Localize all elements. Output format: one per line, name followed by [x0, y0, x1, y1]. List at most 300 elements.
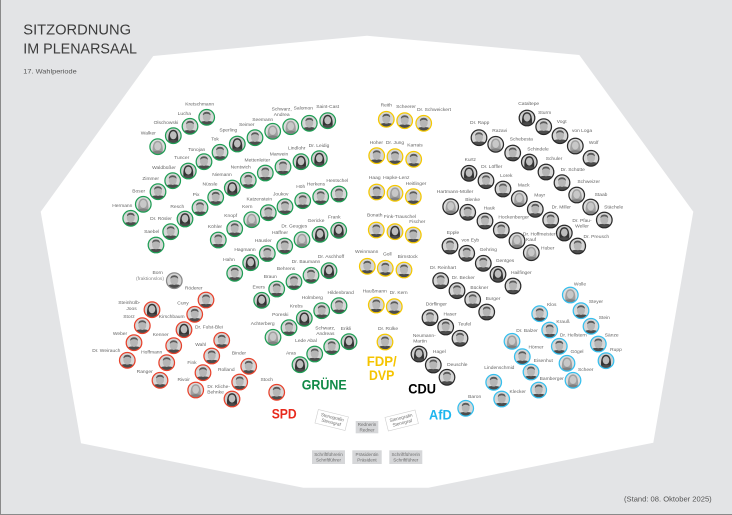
heading: GRÜNE: GRÜNE: [302, 376, 347, 392]
seat: Dr. Baumann: Dr. Baumann: [292, 259, 321, 265]
seat: Dr. Hellstern: [552, 332, 587, 354]
seat: Lede Abal: Lede Abal: [295, 338, 317, 344]
seat: Lindlohr: [288, 146, 309, 170]
seat: Bonath: [367, 212, 384, 238]
seat: Dr. Löffler: [478, 164, 503, 188]
seat: Schwarz, Andrea: Schwarz,: [272, 106, 292, 112]
seat: Köhler: Köhler: [208, 224, 222, 230]
seat: Razavi: [488, 128, 507, 152]
seat: Achterberg: [251, 321, 281, 345]
seat: Klos: Klos: [547, 302, 557, 308]
seat: Bonath: Bonath: [367, 212, 383, 218]
seat: Vogt: [552, 119, 568, 144]
clerk desk left: Schriftführerin: [314, 452, 343, 457]
seat: Gehring: [476, 247, 497, 271]
seat: Wolf: [583, 140, 599, 166]
seat: Dr. Kliche-Behnke: Dr. Kliche-: [207, 384, 230, 390]
seat: Kern: Kern: [242, 204, 253, 210]
seat: Zimmer: [142, 176, 166, 200]
seat: Teufel: Teufel: [458, 322, 471, 328]
seat: Dr. Rülke: [377, 326, 398, 350]
clerk desk left: [312, 450, 345, 464]
seat: Krauß: [542, 319, 570, 338]
seat: Mayr: [528, 192, 546, 217]
clerk desk left: Schriftführer: [316, 458, 341, 462]
seat: Dr. Balzer: Dr. Balzer: [516, 328, 538, 334]
seat: Eisenhut: Eisenhut: [534, 358, 553, 364]
seat: Dr. Schweickert: Dr. Schweickert: [417, 107, 452, 113]
seat: Storz: Storz: [123, 314, 135, 320]
seat: Lindenschmid: Lindenschmid: [484, 365, 515, 371]
seat: Lindenschmid: [484, 365, 515, 390]
seat: Häffner: [272, 230, 293, 254]
seat: Fink: Fink: [187, 360, 197, 366]
seat: Dr. Kern: Dr. Kern: [390, 290, 408, 296]
seat: Hartmann-Müller: Hartmann-Müller: [437, 189, 474, 195]
seat: Scheer: Scheer: [578, 367, 594, 373]
seat: Stoch: Stoch: [260, 377, 273, 383]
seat: Häffner: Häffner: [272, 230, 288, 236]
seat: Mack: [512, 182, 530, 206]
panel: Grüne seats: [112, 102, 357, 373]
speaker desk: Rednerin: [358, 422, 377, 427]
seat: Waldbüßer: Waldbüßer: [152, 165, 176, 171]
seat: Sturm: Sturm: [538, 110, 551, 116]
seat: Dr. Schweickert: [416, 107, 452, 131]
seat: Wahl: Wahl: [195, 342, 206, 348]
seat: Hauk: [477, 206, 496, 229]
seat: Hermann: Hermann: [112, 203, 133, 209]
seat: Mayr: Mayr: [534, 192, 546, 198]
seat: Dr. Rapp: [470, 120, 490, 146]
seat: Hörner: Hörner: [529, 344, 544, 350]
seat: Dr. Jung: [386, 140, 404, 164]
seat: Stoch: [260, 377, 285, 400]
stenographer desk right: [385, 410, 418, 431]
seat: Steinhülb-Joos: [118, 300, 160, 318]
seat: Rolland: [218, 367, 248, 390]
seat: Hentschel: Hentschel: [326, 178, 348, 184]
seat: Marwein: [270, 152, 291, 175]
seat: Hoher: [369, 140, 385, 164]
seat: Schweizer: [569, 179, 600, 203]
seat: Walker: Walker: [141, 130, 156, 136]
seat: Steyer: Steyer: [589, 299, 603, 305]
title: SITZORDNUNG: [23, 22, 131, 38]
seat: Katzenstein: Katzenstein: [247, 196, 272, 202]
seat: Joukov: [273, 192, 293, 214]
seat: Schebesta: [505, 136, 533, 161]
seat: Hockenberger: [494, 214, 529, 238]
seat: Weinmann: [355, 249, 379, 274]
subtitle: 17. Wahlperiode: [23, 70, 77, 76]
seat: Seemann: Seemann: [252, 117, 273, 123]
seat: Niemann: [212, 172, 240, 196]
seat: Lucha: [178, 111, 198, 134]
seat: Haag: [369, 175, 385, 200]
seat: Mack: Mack: [518, 182, 530, 188]
seat: Hockenberger: Hockenberger: [498, 214, 529, 220]
seat: Dr. Aschhoff: [318, 254, 345, 279]
seat: Haußmann: Haußmann: [363, 288, 387, 294]
seat: Haser: Haser: [443, 312, 457, 318]
seat: Lindlohr: Lindlohr: [288, 146, 306, 152]
seat: Boser: [132, 188, 151, 212]
seat: Binder: [232, 350, 256, 374]
seat: Dörflinger: Dörflinger: [426, 302, 447, 308]
seat: Resch: [170, 204, 193, 227]
seat: Saebel: Saebel: [144, 229, 159, 235]
seat: Fischer: [406, 219, 426, 243]
seat: Dr. Fulst-Blei: [195, 324, 230, 348]
seat: Krebs: Krebs: [290, 304, 303, 310]
seat: Aras: Aras: [286, 350, 297, 356]
seat: Dr. Geugjes: [281, 224, 310, 248]
seat: Schindele: [522, 146, 549, 170]
seat: Hartmann-Müller: [437, 189, 474, 214]
seat: Sturm: [536, 110, 552, 134]
seat: Erikli: [341, 326, 357, 350]
seat: Hauk: Hauk: [484, 206, 496, 212]
seat: Olschowski: [154, 120, 181, 144]
seat: von Eyb: [459, 238, 479, 261]
heading: FDP/DVP: [367, 353, 397, 383]
seat: Reith: [378, 102, 394, 127]
seat: Aras: [286, 350, 308, 373]
seat: Blenke: [460, 197, 480, 220]
seat: Höh: Höh: [296, 184, 305, 190]
seat: Rupp: Rupp: [610, 347, 622, 353]
seat: Frank: Frank: [328, 214, 341, 220]
seat: Kurtz: Kurtz: [465, 157, 477, 163]
seat: Scheerer: [396, 104, 416, 128]
seat: Poreski: Poreski: [272, 312, 288, 318]
seat: Nentwich: [231, 164, 256, 188]
seat: Deuschle: Deuschle: [447, 362, 468, 368]
seat: Häusler: Häusler: [255, 238, 272, 244]
seat: Baron: Baron: [468, 394, 481, 400]
seat: Vogt: Vogt: [557, 119, 567, 125]
seat: Heitlinger: Heitlinger: [406, 181, 427, 187]
seat: Saint-Cast: [316, 104, 340, 128]
title: [23, 22, 137, 57]
seat: Köhler: [208, 224, 226, 248]
seat: Dr. Hoffmeister-Kauf: [509, 232, 557, 248]
seat: Kirschbaum: [159, 314, 192, 338]
seat: Resch: Resch: [170, 204, 185, 210]
seat: Staab: Staab: [595, 192, 608, 198]
seat: von Loga: [568, 128, 592, 154]
seat: Schwarz, Andreas: Andreas: [316, 331, 335, 337]
seat: Cataltepe: Cataltepe: [518, 101, 539, 107]
seat: Karrais: Karrais: [407, 142, 423, 148]
seat: Dr. Miller: [543, 204, 571, 228]
seat: Dr. Kliche-Behnke: Behnke: [207, 390, 224, 396]
seat: Dr. Baumann: [292, 259, 321, 283]
clerk desk right: Schriftführer: [393, 458, 419, 462]
stenographer desk right: Stenograf: [392, 418, 413, 428]
seat: Kern: [242, 204, 260, 228]
seat: Rivoir: Rivoir: [177, 377, 190, 383]
seat: Dr. Leidig: [309, 143, 330, 166]
seat: Binder: Binder: [232, 350, 246, 356]
seat: Blenke: Blenke: [465, 197, 480, 203]
seat: Klecker: Klecker: [510, 389, 526, 395]
panel: AfD seats: [458, 282, 622, 416]
seat: Gericke: [308, 218, 328, 242]
seat: Dr. Jung: Dr. Jung: [386, 140, 404, 146]
seat: Kirschbaum: Kirschbaum: [159, 314, 185, 320]
seat: Tonojan: Tonojan: [188, 147, 206, 153]
seat: Dr. Hellstern: Dr. Hellstern: [560, 332, 587, 338]
seat: Knopf: Knopf: [224, 213, 238, 219]
seat: Achterberg: Achterberg: [251, 321, 275, 327]
seat: Schebesta: Schebesta: [510, 136, 533, 142]
seat: Dörflinger: [422, 302, 447, 326]
seat: Stächele: Stächele: [604, 204, 623, 210]
seat: Dr. Becker: Dr. Becker: [452, 275, 475, 281]
seat: Cataltepe: [518, 101, 539, 126]
seat: Epple: Epple: [447, 230, 460, 236]
seat: Dr. Geugjes: Dr. Geugjes: [281, 224, 308, 230]
clerk desk right: Schriftführerin: [391, 452, 421, 457]
seat: Schuler: [538, 156, 563, 180]
heading: FDP/DVP: FDP/: [367, 353, 397, 369]
seat: Poreski: [272, 312, 297, 336]
seat: Frank: [328, 214, 347, 238]
seat: Tuncer: [174, 155, 196, 179]
seat: Storz: [123, 314, 150, 334]
seat: Dr. Löffler: Dr. Löffler: [481, 164, 503, 170]
panel: front benches: [312, 409, 422, 464]
seat: Salomon: [294, 106, 317, 131]
seat: Rupp: [598, 347, 622, 369]
seat: Herkens: [307, 182, 329, 204]
seat: Dr. Pfau-Weller: Dr. Pfau-: [572, 218, 592, 224]
seat: Lorek: Lorek: [500, 173, 513, 179]
speaker desk: [356, 421, 378, 433]
seat: Nüssle: Nüssle: [203, 182, 218, 188]
seat: Dr. Weirauch: Dr. Weirauch: [92, 348, 121, 354]
seat: Karrais: [406, 142, 423, 167]
seat: Born, fraktionslos: [136, 270, 182, 289]
seat: Bückner: Bückner: [470, 285, 489, 291]
stenographer desk left: [315, 409, 348, 431]
seat: Seemann: [252, 117, 281, 139]
seat: Dr. Weirauch: [92, 348, 135, 368]
seat: Gehring: Gehring: [480, 247, 497, 253]
seat: Schwarz, Andreas: Schwarz,: [315, 326, 335, 332]
panel: SPD seats: [92, 286, 285, 407]
seat: Tonojan: [188, 147, 212, 170]
seat: Salomon: Salomon: [294, 106, 313, 112]
president desk: [352, 450, 382, 464]
seat: Wolf: Wolf: [589, 140, 599, 146]
seat: Dr. Kliche-Behnke: [207, 384, 240, 407]
seat: Born, fraktionslos: Born: [153, 270, 163, 276]
seat: Tok: [211, 136, 228, 160]
seat: Dr. Pfau-Weller: Weller: [575, 223, 589, 229]
panel: FDP/DVP seats: [355, 102, 452, 350]
seat: Erikli: Erikli: [341, 326, 351, 332]
seat: Zimmer: Zimmer: [142, 176, 159, 182]
title: IM PLENARSAAL: [23, 41, 137, 57]
seat: Klos: [532, 302, 557, 322]
seat: Kenner: Kenner: [153, 332, 169, 338]
seat: Hildenbrand: Hildenbrand: [328, 290, 354, 296]
plenary hall floor: [41, 36, 693, 488]
seat: Saint-Cast: Saint-Cast: [316, 104, 340, 110]
stenographer desk right: Stenografin: [389, 412, 413, 423]
seat: Hermann: [112, 203, 138, 226]
seat: Stein: Stein: [599, 315, 610, 321]
seat: Burger: Burger: [486, 296, 501, 302]
seat: Reith: Reith: [381, 102, 392, 108]
seat: Cuny: Cuny: [177, 300, 189, 306]
seat: Weber: Weber: [113, 331, 128, 337]
seat: Dr. Kern: [386, 290, 408, 315]
seat: Steyer: [573, 299, 603, 319]
seat: Neumann-Martin: [411, 333, 436, 362]
seat: Hoffmann: Hoffmann: [141, 350, 163, 356]
seat: Gericke: Gericke: [308, 218, 325, 224]
seat: Huber: Huber: [541, 246, 555, 252]
seat: Boser: Boser: [132, 188, 145, 194]
seat: Dr. Fulst-Blei: Dr. Fulst-Blei: [195, 324, 223, 330]
seat: Steinhülb-Joos: Steinhülb-: [118, 300, 141, 306]
seat: Walker: [141, 130, 166, 154]
seat: Scheerer: Scheerer: [396, 104, 416, 110]
seat: Dr. Rösler: [150, 216, 178, 240]
seat: Dr. Aschhoff: Dr. Aschhoff: [318, 254, 345, 260]
seat: Fischer: Fischer: [409, 219, 426, 225]
seat: Lede Abal: [295, 338, 323, 362]
seat: Tok: Tok: [211, 136, 219, 142]
seat: Weinmann: Weinmann: [355, 249, 379, 255]
seat: Gögel: Gögel: [570, 349, 584, 355]
seat: Neumann-Martin: Neumann-: [413, 333, 436, 339]
heading: FDP/DVP: DVP: [369, 367, 394, 383]
seat: Stächele: [596, 204, 623, 228]
seat: Waldbüßer: [152, 165, 180, 188]
seat: Haußmann: [363, 288, 387, 313]
seat: Rivoir: [177, 377, 204, 398]
seat: Goll: [378, 252, 393, 276]
seat: Weber: [113, 331, 142, 351]
seat: Fink-Trauschel: Fink-Trauschel: [384, 214, 416, 220]
seat: Hoher: Hoher: [370, 140, 383, 146]
seat: Kretschmann: Kretschmann: [185, 102, 214, 108]
seat: Deuschle: [439, 362, 468, 385]
seat: Stein: [583, 315, 610, 334]
seat: Hagel: [426, 349, 446, 373]
seat: Röderer: Röderer: [185, 286, 203, 292]
panel: CDU seats: [411, 101, 623, 385]
seat: Mettenleiter: [245, 158, 273, 181]
seat: Mettenleiter: Mettenleiter: [245, 158, 270, 164]
president desk: Präsidentin: [356, 452, 379, 457]
seat: Ranger: Ranger: [137, 369, 153, 375]
seat: Dr. Preusch: Dr. Preusch: [584, 234, 609, 240]
seat: Saebel: [144, 229, 164, 253]
seat: Scheer: [565, 367, 594, 388]
seat: Dr. Rapp: Dr. Rapp: [470, 120, 490, 126]
seat: Haag: Haag: [369, 175, 381, 181]
seat: Katzenstein: [247, 196, 276, 220]
seat: Sperling: Sperling: [219, 128, 238, 134]
seat: Behrens: [277, 266, 302, 290]
seat: Eisenhut: [523, 358, 553, 380]
seat: Hahn: [223, 257, 242, 281]
seat: Dr. Becker: [449, 275, 475, 299]
seat: Baron: [458, 394, 481, 416]
seat: Behrens: Behrens: [277, 266, 296, 272]
seat: Holmberg: [302, 295, 330, 319]
stenographer desk left: Stenografin: [320, 412, 345, 423]
clerk desk right: [389, 450, 422, 464]
seat: Wolle: [562, 282, 586, 303]
seat: Gentges: [490, 258, 515, 282]
seat: Krauß: Krauß: [556, 319, 570, 325]
seat: Nüssle: [203, 182, 224, 205]
seat: Dr. Hoffmeister-Kauf: Kauf: [526, 237, 537, 243]
seat: Seimer: [239, 122, 263, 146]
president desk: Präsident: [357, 458, 377, 462]
stenographer desk left: Stenograf: [321, 417, 342, 427]
seat: Pix: Pix: [193, 192, 200, 198]
seat: Huber: [524, 245, 555, 260]
seat: Sänze: Sänze: [605, 332, 619, 338]
seat: von Eyb: von Eyb: [461, 238, 479, 244]
seat: Bamberger: Bamberger: [540, 376, 564, 382]
seat: Schuler: Schuler: [546, 156, 563, 162]
seat: Fink: [187, 360, 211, 381]
seat: Gentges: Gentges: [496, 258, 515, 264]
seat: Joukov: Joukov: [273, 192, 289, 198]
seat: Kurtz: [461, 157, 477, 181]
heading: SPD: SPD: [272, 405, 297, 421]
seat: Pix: [192, 192, 208, 216]
seat: Born, fraktionslos: (fraktionslos): [136, 276, 164, 282]
seat: Sperling: [219, 128, 245, 152]
seat: Dr. Preusch: [570, 234, 609, 254]
speaker desk: Redner: [359, 428, 375, 432]
seat: Häusler: [255, 238, 275, 261]
seat: Staab: [583, 192, 608, 215]
seat: Schwarz, Andreas: [315, 326, 340, 355]
seat: von Loga: von Loga: [572, 128, 592, 134]
seat: Dr. Schütte: [554, 167, 585, 190]
heading: AfD: AfD: [429, 406, 452, 422]
seat: Dr. Schütte: Dr. Schütte: [561, 167, 585, 173]
seat: Hörner: [514, 344, 544, 365]
seat: Wahl: [195, 342, 220, 364]
seat: Evers: Evers: [252, 284, 265, 290]
seat: Rolland: Rolland: [218, 367, 235, 373]
seat: Braun: [264, 274, 285, 297]
seat: Hailfinger: Hailfinger: [511, 270, 532, 276]
seat: Birnstock: [396, 254, 418, 278]
seat: Heitlinger: [406, 181, 427, 204]
seat: Bückner: [465, 285, 489, 308]
seat: Dr. Reinhart: [430, 265, 457, 289]
seat: Olschowski: Olschowski: [154, 120, 178, 126]
heading: CDU: CDU: [408, 380, 436, 396]
seat: Schwarz, Andrea: Andrea: [274, 112, 290, 118]
seat: Röderer: [185, 286, 214, 308]
seat: Birnstock: Birnstock: [398, 254, 418, 260]
seat: Marwein: Marwein: [270, 152, 289, 158]
